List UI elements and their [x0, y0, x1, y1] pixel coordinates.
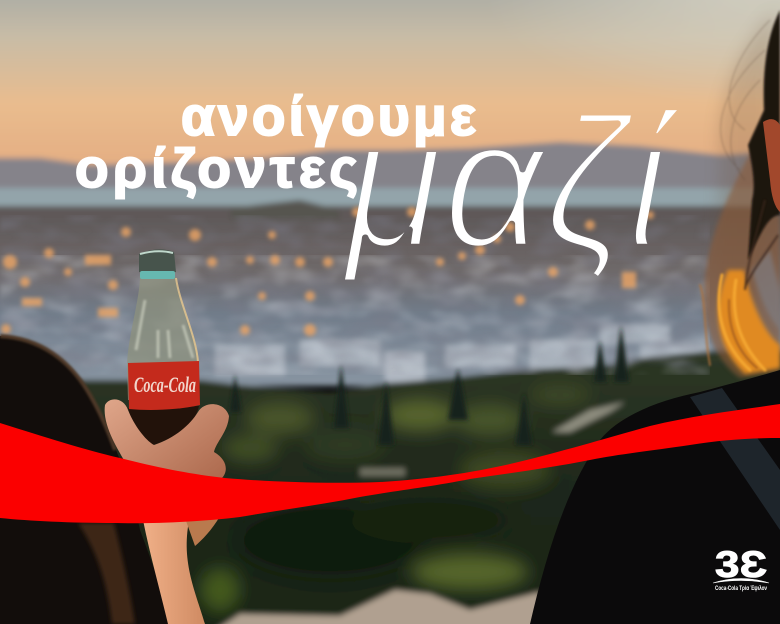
right person: dark hair strands: [745, 200, 778, 290]
left person: hair highlight: [78, 523, 135, 624]
left person: hair rim light: [0, 336, 115, 450]
bottle teal ring: [140, 271, 175, 279]
left person: hair and back: [0, 336, 172, 624]
right person: black top: [530, 370, 780, 624]
city texture: shadows: [0, 215, 710, 375]
bottle dark liquid: [128, 406, 199, 445]
bottle red label: [128, 361, 200, 410]
left person: wrist: [185, 516, 220, 546]
bottle lip highlight: [140, 251, 173, 254]
bottle glass rim light: [176, 278, 198, 362]
foreground: rocks: [210, 590, 540, 624]
title line 2: ορίζοντες: [75, 137, 358, 199]
right person: backpack strap: [690, 388, 780, 530]
logo mark: 3Ɛ: [715, 544, 767, 585]
bottle logo script: Coca-Cola: [134, 372, 196, 397]
background: sunset sky: [0, 0, 780, 170]
background: pale sky glow: [400, 0, 780, 160]
background: hillside forest: [0, 350, 780, 624]
bottle of Coca-Cola: [127, 249, 200, 445]
background: city panorama: [0, 200, 780, 386]
logo: Coca-Cola Τρία Έψιλον: [713, 544, 769, 592]
bottle highlights: [136, 300, 193, 358]
background: sea: [0, 188, 780, 208]
title line 1: ανοίγουμε: [181, 85, 476, 147]
background: mountains: [0, 142, 780, 200]
right person: glowing orange hair: [718, 270, 780, 374]
city lights: warm bokeh: [1, 207, 654, 336]
bottle lip: [139, 249, 176, 274]
bottle glass: [127, 275, 199, 400]
red ribbon: [0, 404, 780, 523]
title thin word: μαζί: [341, 80, 682, 287]
cypress trees: [230, 325, 629, 445]
city texture: light rooftops: [0, 255, 710, 375]
right person: sunlit hair strands: [700, 275, 765, 370]
hand holding bottle: [105, 399, 229, 490]
right person: hair haze over sky: [715, 10, 775, 300]
logo swoosh: [713, 578, 769, 583]
right person: background through hair: [752, 250, 780, 330]
right person: brown hair mass: [704, 150, 780, 378]
left person: arm: [143, 516, 205, 624]
right person: fine flyaway hair: [721, 20, 770, 180]
right person: ear: [763, 119, 780, 212]
right person: dark hair: [748, 10, 780, 260]
